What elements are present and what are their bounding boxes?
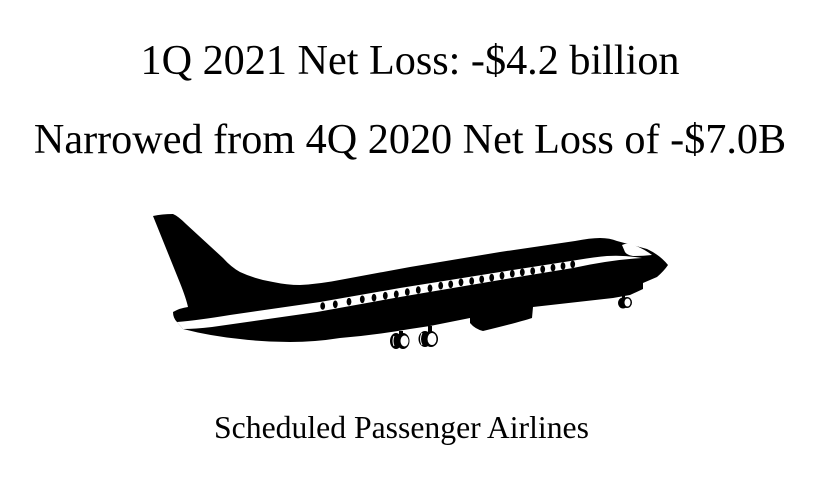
subtitle: comparison with previous quarter: Narrowed from 4Q 2020 Net Loss of -$7.0B <box>34 116 786 163</box>
passenger windows <box>320 260 575 310</box>
cockpit window <box>622 244 652 256</box>
main landing gear front <box>418 326 438 347</box>
fuselage and tail <box>153 214 668 342</box>
white window stripe <box>177 256 642 329</box>
title: net loss headline: 1Q 2021 Net Loss: -$4.2 billion <box>140 37 680 84</box>
caption: scheduled passenger airlines: Scheduled Passenger Airlines <box>214 410 589 445</box>
nose landing gear <box>618 295 632 308</box>
main landing gear rear <box>390 331 410 349</box>
